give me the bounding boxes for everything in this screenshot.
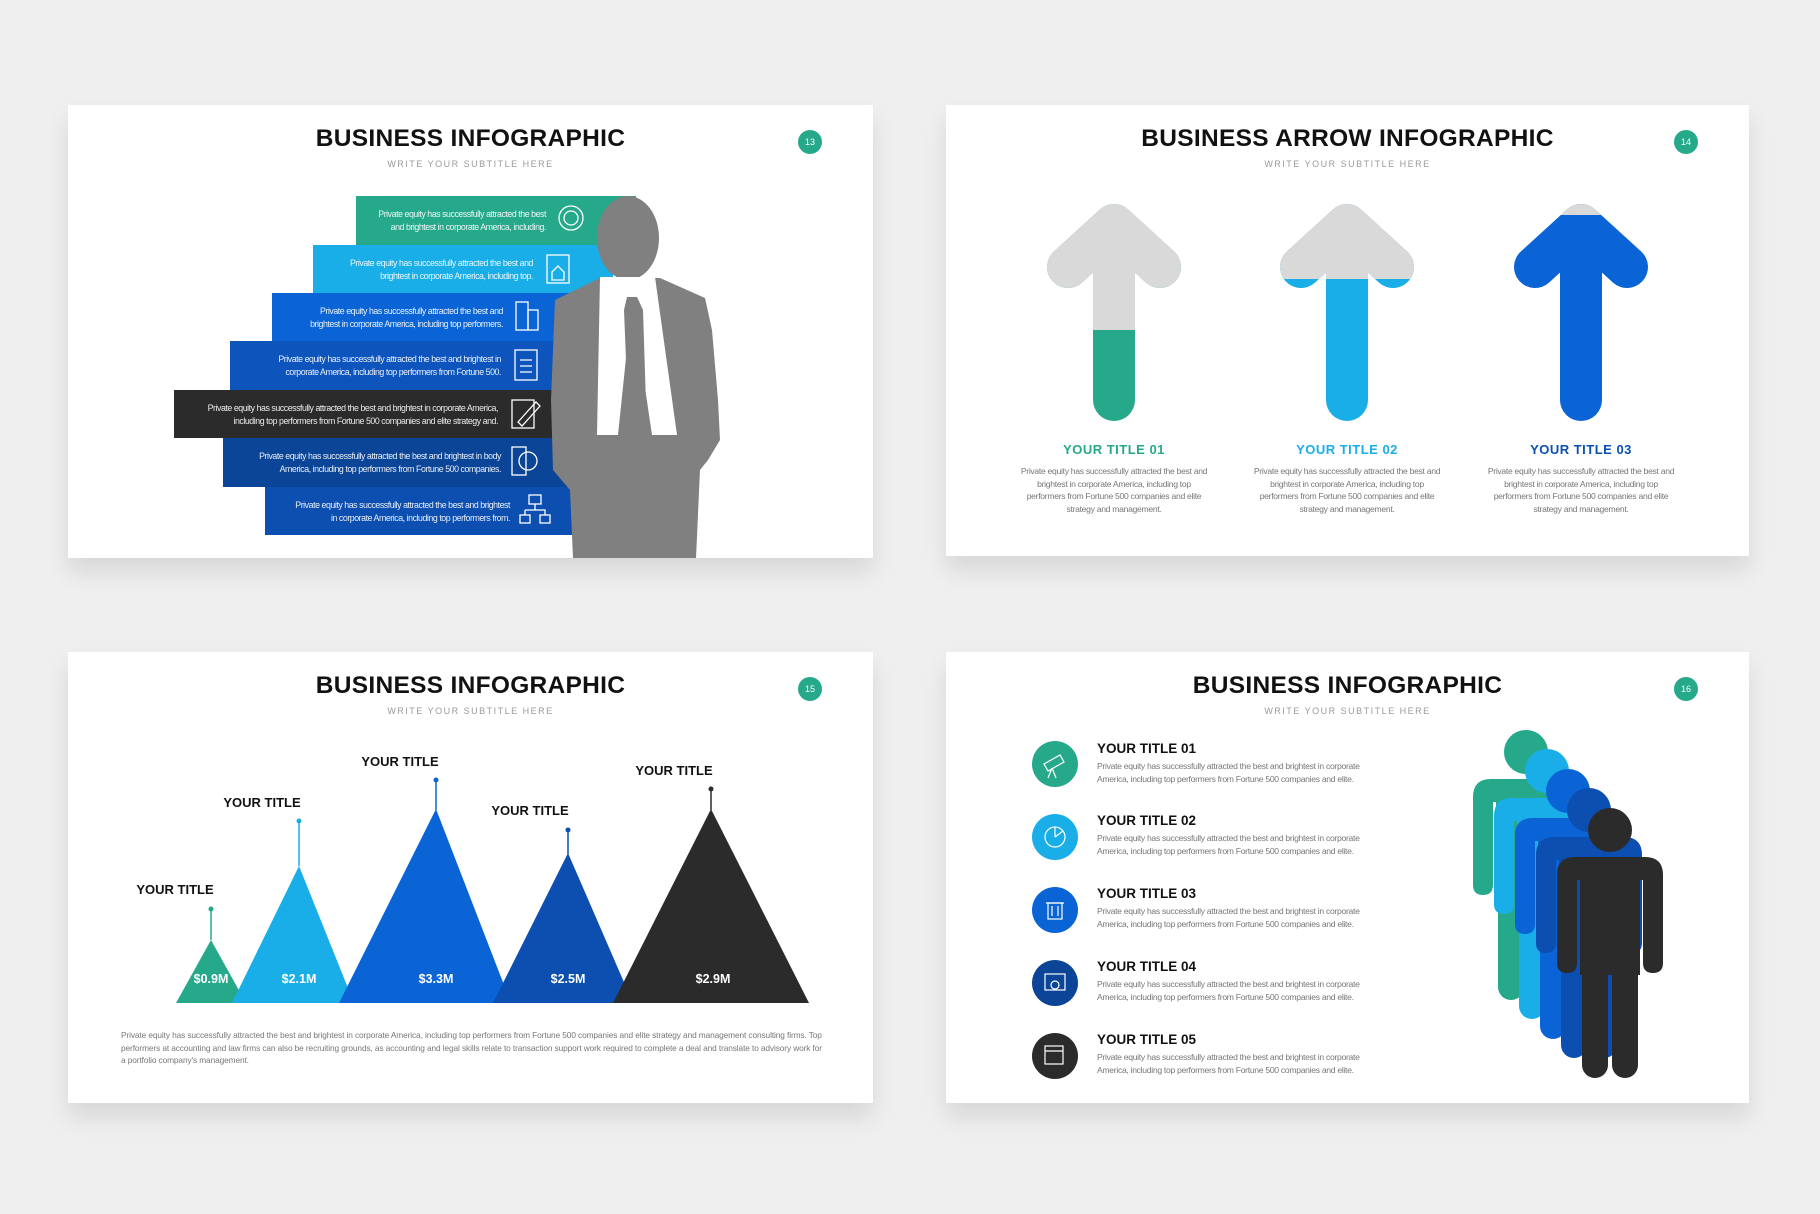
text: arrow 01: Private equity has successfully attracted the best and brightest in corporate America, including top performers from Fortune 500 companies and elite strategy and management.	[1021, 466, 1207, 514]
triangle chart: YOUR TITLE	[136, 882, 214, 897]
text: bar labels: brightest in corporate America, including top.	[380, 270, 533, 280]
title: BUSINESS ARROW INFOGRAPHIC	[1141, 125, 1554, 152]
list item 5	[1097, 1032, 1360, 1074]
text: arrow 02: YOUR TITLE 02	[1296, 442, 1398, 457]
triangle chart: $2.9M	[696, 972, 730, 986]
badge	[1674, 130, 1698, 154]
badge	[798, 130, 822, 154]
list item 3: YOUR TITLE 03	[1097, 886, 1196, 901]
list item 5: America, including top performers from Fortune 500 companies and elite.	[1097, 1064, 1354, 1074]
badge	[798, 677, 822, 701]
list item 1: YOUR TITLE 01	[1097, 741, 1196, 756]
text: arrow 03: Private equity has successfully attracted the best and brightest in corporate America, including top performers from Fortune 500 companies and elite strategy and management.	[1488, 466, 1674, 514]
text: arrow 03: YOUR TITLE 03	[1530, 442, 1632, 457]
list item 5: Private equity has successfully attracted the best and brightest in corporate	[1097, 1052, 1360, 1062]
title: BUSINESS INFOGRAPHIC	[316, 672, 625, 699]
text: bar labels: Private equity has successfully attracted the best and brightest	[295, 500, 510, 510]
people figures	[1473, 730, 1663, 1078]
text: bar labels: and brightest in corporate America, including.	[391, 222, 546, 232]
text: bar labels: corporate America, including top performers from Fortune 500.	[285, 366, 501, 376]
badge: 16	[1681, 684, 1691, 694]
text: bar labels: America, including top performers from Fortune 500 companies.	[280, 464, 501, 474]
text: arrow 01: YOUR TITLE 01	[1063, 442, 1165, 457]
text: bar labels: brightest in corporate America, including top performers.	[310, 318, 503, 328]
triangle chart	[136, 754, 809, 1003]
triangle chart: $2.5M	[551, 972, 585, 986]
badge: 15	[805, 684, 815, 694]
text: bar labels: Private equity has successfully attracted the best	[378, 209, 546, 219]
text: arrow 02: Private equity has successfully attracted the best and brightest in corporate America, including top performers from Fortune 500 companies and elite strategy and management.	[1254, 466, 1440, 514]
list item 1: Private equity has successfully attracted the best and brightest in corporate	[1097, 761, 1360, 771]
text: arrow 02	[1254, 442, 1440, 514]
man silhouette	[551, 196, 720, 558]
title: BUSINESS INFOGRAPHIC	[1193, 672, 1502, 699]
text: bar labels: Private equity has successfully attracted the best and brightest in corporate America,	[208, 403, 498, 413]
triangle chart: YOUR TITLE	[361, 754, 439, 769]
text: bar labels: Private equity has successfully attracted the best and brightest in	[278, 354, 501, 364]
list item 3: America, including top performers from Fortune 500 companies and elite.	[1097, 918, 1354, 928]
text: bar labels: in corporate America, including top performers from.	[331, 512, 510, 522]
arrows chart	[1047, 204, 1648, 421]
panel: business infographic 15	[68, 652, 873, 1103]
triangle chart: $3.3M	[419, 972, 453, 986]
list item 3	[1097, 886, 1360, 928]
text: bar labels: Private equity has successfully attracted the best and brightest in body	[259, 451, 501, 461]
list item 1: America, including top performers from Fortune 500 companies and elite.	[1097, 774, 1354, 784]
paragraph: Private equity has successfully attracted the best and brightest in corporate America, including top performers from Fortune 500 companies and elite strategy and management consulting firms. Top performers at accounting and law firms can also be recruiting grounds, as accounting and legal skills relate to transaction support work required to complete a deal and translate to advisory work for a portfolio company's management.	[121, 1030, 822, 1065]
triangle chart: YOUR TITLE	[635, 763, 713, 778]
badge: 14	[1681, 137, 1691, 147]
list item 1	[1097, 741, 1360, 784]
text: arrow 01	[1021, 442, 1207, 514]
list item 2: America, including top performers from Fortune 500 companies and elite.	[1097, 846, 1354, 856]
subtitle: WRITE YOUR SUBTITLE HERE	[1264, 706, 1431, 716]
subtitle: WRITE YOUR SUBTITLE HERE	[387, 706, 554, 716]
badge	[1674, 677, 1698, 701]
triangle chart: $0.9M	[194, 972, 228, 986]
text: bar labels: Private equity has successfully attracted the best and	[350, 258, 533, 268]
text: bar labels: Private equity has successfully attracted the best and	[320, 306, 503, 316]
triangle chart: $2.1M	[282, 972, 316, 986]
panel: business infographic 16	[946, 652, 1749, 1103]
list item 4: Private equity has successfully attracted the best and brightest in corporate	[1097, 979, 1360, 989]
subtitle: WRITE YOUR SUBTITLE HERE	[1264, 159, 1431, 169]
text: bar labels	[208, 209, 546, 523]
title: BUSINESS INFOGRAPHIC	[316, 125, 625, 152]
text: bar labels: including top performers from Fortune 500 companies and elite strategy and.	[233, 416, 498, 426]
list item 2: Private equity has successfully attracted the best and brightest in corporate	[1097, 833, 1360, 843]
list item 4: America, including top performers from Fortune 500 companies and elite.	[1097, 992, 1354, 1002]
text: arrow 03	[1488, 442, 1674, 514]
panel: business arrow infographic 14	[946, 105, 1749, 556]
list item 2: YOUR TITLE 02	[1097, 813, 1196, 828]
step bars chart	[174, 196, 636, 535]
list item 3: Private equity has successfully attracted the best and brightest in corporate	[1097, 906, 1360, 916]
panel: business infographic 13	[68, 105, 873, 558]
triangle chart: YOUR TITLE	[491, 803, 569, 818]
list item 4	[1097, 959, 1360, 1002]
list item 5: YOUR TITLE 05	[1097, 1032, 1196, 1047]
badge: 13	[805, 137, 815, 147]
subtitle: WRITE YOUR SUBTITLE HERE	[387, 159, 554, 169]
icons list	[1032, 741, 1078, 1079]
list item 2	[1097, 813, 1360, 856]
list item 4: YOUR TITLE 04	[1097, 959, 1196, 974]
triangle chart: YOUR TITLE	[223, 795, 301, 810]
